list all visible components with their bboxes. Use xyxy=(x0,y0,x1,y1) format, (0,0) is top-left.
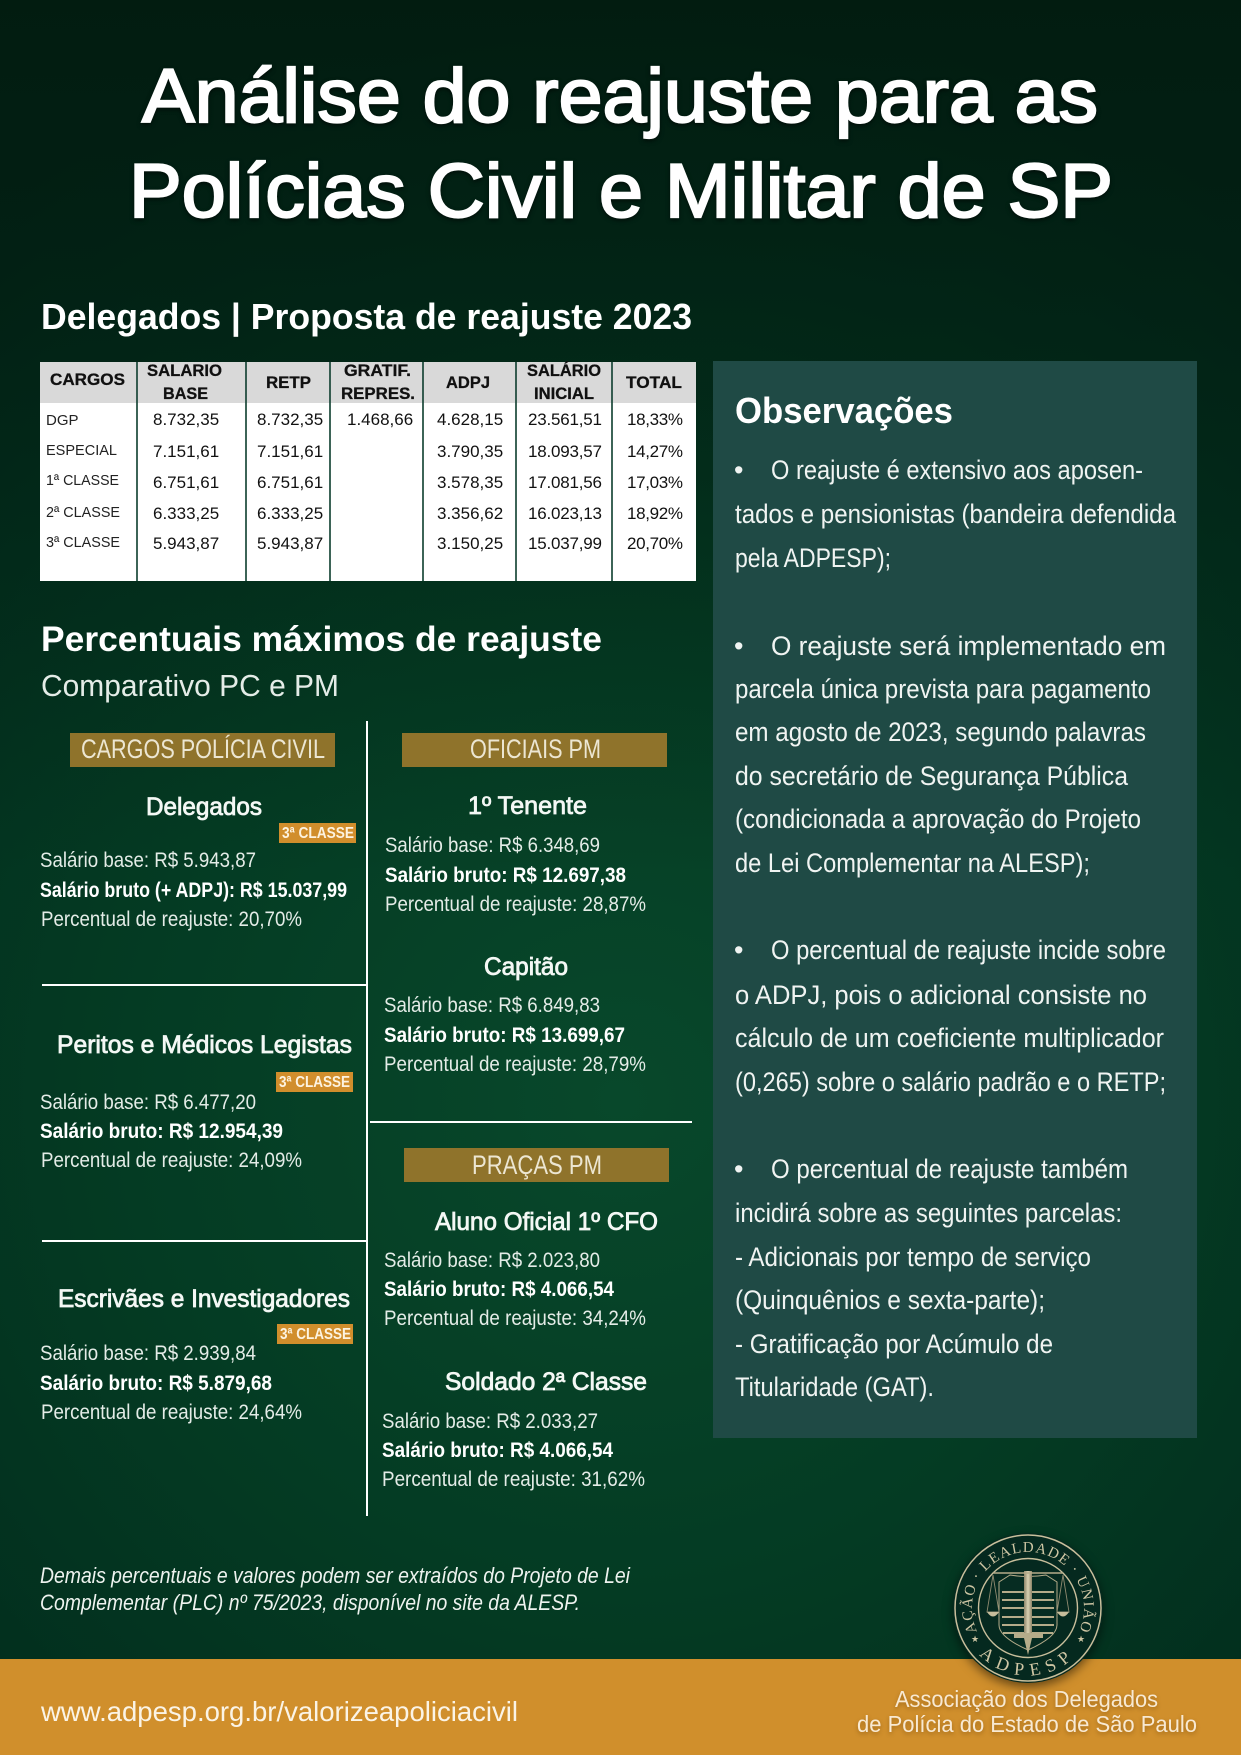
table rows xyxy=(46,410,683,553)
item: peritos e médicos legistas: Salário base: R$ 6.477,20 xyxy=(40,1091,256,1114)
table rows: 3.790,35 xyxy=(437,442,503,461)
observation 3 xyxy=(734,935,1166,1097)
item: escrivães e investigadores: Salário bruto: R$ 5.879,68 xyxy=(40,1372,272,1395)
table rows: 17.081,56 xyxy=(528,473,602,492)
observation 1: • xyxy=(734,455,743,485)
item: delegados: Percentual de reajuste: 20,70% xyxy=(41,908,302,931)
table rows: 1.468,66 xyxy=(347,410,413,429)
observation 3: cálculo de um coeficiente multiplicador xyxy=(735,1023,1164,1053)
table rows: 1ª CLASSE xyxy=(46,472,119,489)
observation 2: • xyxy=(734,631,743,661)
item: soldado 2ª classe: Soldado 2ª Classe xyxy=(445,1368,647,1396)
footer url: www.adpesp.org.br/valorizeapoliciacivil xyxy=(40,1696,518,1727)
item: 1º tenente xyxy=(385,792,646,916)
item: 1º tenente: Salário base: R$ 6.348,69 xyxy=(385,834,600,857)
observation 1: tados e pensionistas (bandeira defendida xyxy=(735,499,1177,529)
item: soldado 2ª classe: Salário base: R$ 2.033,27 xyxy=(382,1410,598,1433)
observation 1: O reajuste é extensivo aos aposen- xyxy=(771,455,1143,485)
item: aluno oficial: Percentual de reajuste: 34,24% xyxy=(384,1307,646,1330)
observation 2: O reajuste será implementado em xyxy=(771,631,1166,661)
item: escrivães e investigadores xyxy=(40,1285,353,1424)
item: delegados: Salário base: R$ 5.943,87 xyxy=(40,849,256,872)
item: delegados: Delegados xyxy=(146,793,262,821)
table header: GRATIF. xyxy=(344,361,411,380)
table rows: 15.037,99 xyxy=(528,534,602,553)
panel heading: Observações xyxy=(735,390,953,431)
title xyxy=(129,54,1113,234)
item: aluno oficial: Salário base: R$ 2.023,80 xyxy=(384,1249,600,1272)
seal shield xyxy=(987,1571,1069,1655)
table header: RETP xyxy=(266,373,311,392)
observation 4: - Gratificação por Acúmulo de xyxy=(735,1329,1053,1359)
table rows: 3.356,62 xyxy=(437,504,503,523)
item: 1º tenente: 1º Tenente xyxy=(468,792,587,820)
observation 2: de Lei Complementar na ALESP); xyxy=(735,848,1090,878)
footer association name: Associação dos Delegados xyxy=(895,1686,1158,1712)
table: proposta de reajuste xyxy=(40,361,696,581)
heading: delegados proposta: Delegados | Proposta de reajuste 2023 xyxy=(41,296,692,338)
badge: praças pm: PRAÇAS PM xyxy=(472,1150,602,1180)
item: escrivães e investigadores: Escrivães e Investigadores xyxy=(58,1285,350,1313)
footer band xyxy=(0,1659,1241,1755)
item: delegados: Salário bruto (+ ADPJ): R$ 15.037,99 xyxy=(40,879,347,902)
table rows: 8.732,35 xyxy=(153,410,219,429)
title: Análise do reajuste para as xyxy=(142,54,1098,139)
table header: TOTAL xyxy=(626,373,682,392)
observation 2: (condicionada a aprovação do Projeto xyxy=(735,804,1141,834)
table rows: 6.333,25 xyxy=(257,504,323,523)
seal stars: ★ xyxy=(1077,1634,1085,1644)
footer association name xyxy=(857,1686,1197,1737)
item: peritos e médicos legistas: Salário bruto: R$ 12.954,39 xyxy=(40,1120,283,1143)
footnote: Complementar (PLC) nº 75/2023, disponível no site da ALESP. xyxy=(40,1590,580,1615)
table rows: 6.751,61 xyxy=(153,473,219,492)
badge: oficiais pm xyxy=(402,733,667,767)
item: aluno oficial: Salário bruto: R$ 4.066,54 xyxy=(384,1278,614,1301)
table rows: 18,92% xyxy=(627,504,683,523)
table header: REPRES. xyxy=(341,384,415,403)
table header: INICIAL xyxy=(534,384,594,403)
footnote xyxy=(40,1563,631,1615)
seal name: ADPESP xyxy=(978,1649,1068,1676)
heading: percentuais máximos: Percentuais máximos de reajuste xyxy=(41,620,602,659)
item: capitão: Salário bruto: R$ 13.699,67 xyxy=(384,1024,625,1047)
table rows: 8.732,35 xyxy=(257,410,323,429)
seal stars xyxy=(971,1634,1085,1644)
table header xyxy=(50,361,682,403)
item: capitão: Salário base: R$ 6.849,83 xyxy=(384,994,600,1017)
observation 4: (Quinquênios e sexta-parte); xyxy=(735,1285,1045,1315)
observation 2: parcela única prevista para pagamento xyxy=(735,674,1151,704)
icon: adpesp seal xyxy=(950,1533,1106,1694)
table rows: DGP xyxy=(46,412,79,429)
observation 4 xyxy=(734,1154,1128,1402)
observation 4: Titularidade (GAT). xyxy=(735,1372,934,1402)
table rows: 16.023,13 xyxy=(528,504,602,523)
table rows: 3ª CLASSE xyxy=(46,534,120,551)
badge: 3ª classe: 3ª CLASSE xyxy=(279,1074,350,1091)
table header: CARGOS xyxy=(50,370,125,389)
panel: observações xyxy=(713,361,1197,1438)
table rows: 3.578,35 xyxy=(437,473,503,492)
footer association name: de Polícia do Estado de São Paulo xyxy=(857,1711,1197,1737)
item: peritos e médicos legistas: Peritos e Médicos Legistas xyxy=(57,1031,352,1059)
item: 1º tenente: Salário bruto: R$ 12.697,38 xyxy=(385,864,626,887)
seal motto: AÇÃO · LEALDADE · UNIÃO xyxy=(960,1542,1096,1632)
item: delegados xyxy=(40,793,356,931)
badge: 3ª classe: 3ª CLASSE xyxy=(282,825,354,842)
observation 1: pela ADPESP); xyxy=(735,543,891,573)
table rows: 23.561,51 xyxy=(528,410,602,429)
table rows: 3.150,25 xyxy=(437,534,503,553)
item: capitão xyxy=(384,953,646,1076)
table rows: ESPECIAL xyxy=(46,442,117,459)
title: Polícias Civil e Militar de SP xyxy=(129,149,1113,234)
item: escrivães e investigadores: Percentual de reajuste: 24,64% xyxy=(41,1401,302,1424)
badge: cargos polícia civil: CARGOS POLÍCIA CIVIL xyxy=(81,734,325,764)
observation 3: • xyxy=(734,935,743,965)
observation 4: incidirá sobre as seguintes parcelas: xyxy=(735,1198,1122,1228)
table rows: 6.333,25 xyxy=(153,504,219,523)
observation 4: - Adicionais por tempo de serviço xyxy=(735,1242,1091,1272)
item: aluno oficial xyxy=(384,1208,658,1330)
badge: praças pm xyxy=(404,1148,669,1182)
table rows: 14,27% xyxy=(627,442,683,461)
table header: ADPJ xyxy=(446,373,490,392)
table rows: 7.151,61 xyxy=(257,442,323,461)
observation 2: do secretário de Segurança Pública xyxy=(735,761,1129,791)
item: aluno oficial: Aluno Oficial 1º CFO xyxy=(435,1208,658,1236)
table rows: 18.093,57 xyxy=(528,442,602,461)
table rows: 6.751,61 xyxy=(257,473,323,492)
table rows: 4.628,15 xyxy=(437,410,503,429)
item: soldado 2ª classe xyxy=(382,1368,647,1491)
table header: SALARIO xyxy=(147,361,222,380)
item: capitão: Percentual de reajuste: 28,79% xyxy=(384,1053,646,1076)
observation 4: O percentual de reajuste também xyxy=(771,1154,1128,1184)
item: soldado 2ª classe: Percentual de reajuste: 31,62% xyxy=(382,1468,645,1491)
badge: oficiais pm: OFICIAIS PM xyxy=(470,734,601,764)
table rows: 17,03% xyxy=(627,473,683,492)
observation 3: (0,265) sobre o salário padrão e o RETP; xyxy=(735,1067,1166,1097)
observation 3: O percentual de reajuste incide sobre xyxy=(771,935,1166,965)
seal stars: ★ xyxy=(971,1634,979,1644)
badge: 3ª classe: 3ª CLASSE xyxy=(280,1326,351,1343)
observation 3: o ADPJ, pois o adicional consiste no xyxy=(735,980,1147,1010)
subheading: comparativo: Comparativo PC e PM xyxy=(41,668,339,703)
observation 2: em agosto de 2023, segundo palavras xyxy=(735,717,1146,747)
table rows: 5.943,87 xyxy=(153,534,219,553)
table header: SALÁRIO xyxy=(527,361,601,380)
item: peritos e médicos legistas: Percentual de reajuste: 24,09% xyxy=(41,1149,302,1172)
table header: BASE xyxy=(163,384,208,403)
item: peritos e médicos legistas xyxy=(40,1031,353,1172)
table rows: 2ª CLASSE xyxy=(46,504,120,521)
table rows: 5.943,87 xyxy=(257,534,323,553)
item: soldado 2ª classe: Salário bruto: R$ 4.066,54 xyxy=(382,1439,613,1462)
table rows: 20,70% xyxy=(627,534,683,553)
table rows: 7.151,61 xyxy=(153,442,219,461)
observation 4: • xyxy=(734,1154,743,1184)
item: 1º tenente: Percentual de reajuste: 28,87% xyxy=(385,893,646,916)
observation 1 xyxy=(734,455,1177,573)
table rows: 18,33% xyxy=(627,410,683,429)
observation 2 xyxy=(734,631,1166,878)
footnote: Demais percentuais e valores podem ser extraídos do Projeto de Lei xyxy=(40,1563,631,1588)
item: escrivães e investigadores: Salário base: R$ 2.939,84 xyxy=(40,1342,256,1365)
item: capitão: Capitão xyxy=(484,953,568,981)
